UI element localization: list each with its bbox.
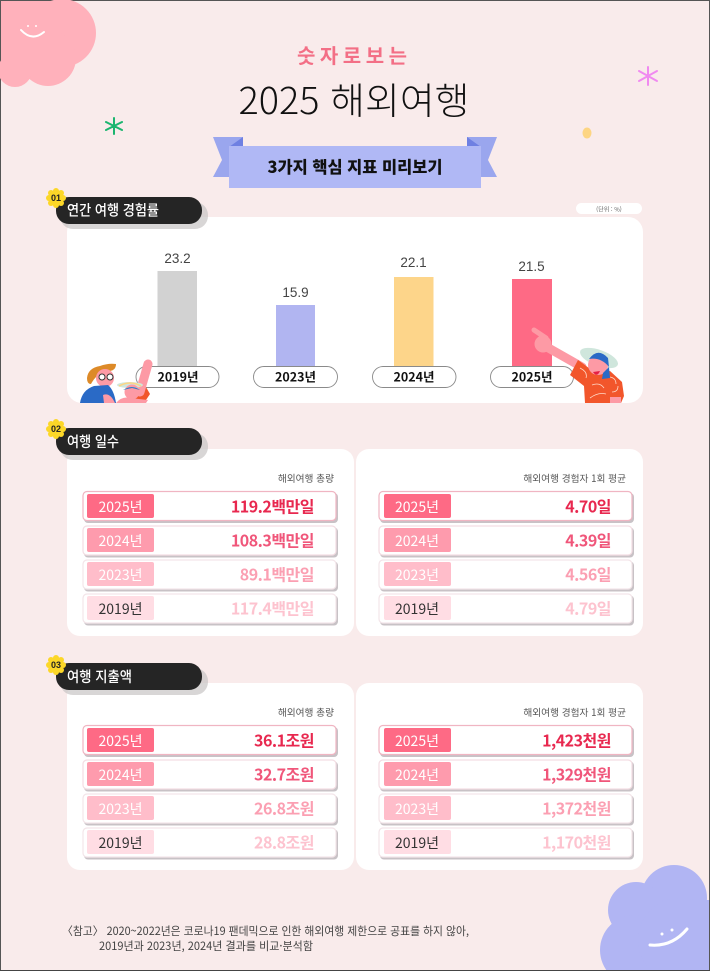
bar chart: 21.5 [518,259,545,274]
unit label [576,203,642,214]
bar chart [136,251,574,388]
row 2024: 2024년 [395,531,439,551]
panel: spending total [67,683,354,870]
footnote [62,923,469,954]
ribbon banner [213,137,497,188]
row 2023: 4.56일 [565,562,611,586]
row 2025: 4.70일 [565,494,611,518]
row 2023 [83,560,338,592]
row 2024 [83,760,338,792]
row 2025: 2025년 [395,497,439,517]
badge 02: 02 [51,424,61,434]
row 2025: 119.2백만일 [231,494,314,518]
row 2023 [379,794,634,826]
row 2024: 108.3백만일 [231,528,314,552]
footnote: 2019년과 2023년, 2024년 결과를 비교·분석함 [99,938,313,954]
row 2023: 1,372천원 [542,796,611,820]
row 2019: 2019년 [395,599,439,619]
row 2024 [83,526,338,558]
section header 01 [46,188,208,229]
bar chart: 23.2 [164,251,191,266]
row 2023 [379,560,634,592]
decoration: pink flower with smile [0,0,96,87]
row 2023: 2023년 [395,565,439,585]
row 2023: 2023년 [99,799,142,819]
row 2019 [379,828,634,860]
panel: spending per trip [356,683,643,870]
section header 03: 여행 지출액 [67,666,132,687]
row 2024: 32.7조원 [254,762,314,786]
icon: pointing traveler [534,330,624,403]
bar chart: 2019년 [157,366,199,386]
panel: travel days total [67,449,354,636]
row 2019: 2019년 [395,833,439,853]
row 2019: 2019년 [99,833,142,853]
caption: 해외여행 총량 [278,705,334,719]
row 2023: 89.1백만일 [240,562,314,586]
row 2019 [83,594,338,626]
section header 03 [46,655,208,695]
row 2019: 28.8조원 [254,830,314,854]
row 2025: 2025년 [395,731,439,751]
bar chart: 22.1 [400,255,427,270]
row 2019: 117.4백만일 [231,596,314,620]
panel: travel days per trip [356,449,643,636]
row 2025: 1,423천원 [542,728,611,752]
badge 03: 03 [51,660,61,670]
row 2025: 2025년 [99,731,142,751]
icon: couple of travelers [80,364,150,403]
row 2024: 2024년 [395,765,439,785]
badge 03 [46,655,66,675]
row 2024: 2024년 [99,765,142,785]
row 2025 [83,492,338,523]
bar chart: 2025년 [511,366,553,386]
row 2024 [379,760,634,792]
ribbon banner: 3가지 핵심 지표 미리보기 [268,154,442,178]
row 2019: 4.79일 [565,596,611,620]
bar chart: 15.9 [282,285,309,300]
row 2024: 1,329천원 [542,762,611,786]
row 2019: 2019년 [99,599,142,619]
decoration: yellow dot [582,128,592,138]
row 2024: 4.39일 [565,528,611,552]
row 2024: 2024년 [99,531,142,551]
badge 02 [46,419,66,439]
section header 02 [46,419,208,460]
caption: 해외여행 경험자 1회 평균 [523,705,626,719]
row 2023 [83,794,338,826]
caption: 해외여행 총량 [278,471,334,485]
row 2025: 36.1조원 [254,728,314,752]
unit label: (단위 : %) [596,204,622,214]
row 2024 [379,526,634,558]
section header 02: 여행 일수 [67,431,119,452]
row 2019: 1,170천원 [542,830,611,854]
decoration: green asterisk [106,118,122,134]
row 2023: 2023년 [395,799,439,819]
row 2025 [379,492,634,523]
caption: 해외여행 경험자 1회 평균 [523,471,626,485]
row 2025 [83,726,338,757]
row 2019 [83,828,338,860]
decoration: periwinkle flower with smile [600,865,710,971]
panel: annual travel experience rate [67,217,643,403]
bar chart: 2024년 [393,366,435,386]
badge 01 [46,188,66,208]
footnote: 〈참고〉 2020~2022년은 코로나19 팬데믹으로 인한 해외여행 제한으로 공표를 하지 않아, [62,923,469,939]
title: 2025 해외여행 [238,71,470,125]
section header 01: 연간 여행 경험률 [67,200,159,220]
decoration: violet asterisk [639,67,657,85]
row 2025 [379,726,634,757]
row 2025: 2025년 [99,497,142,517]
subtitle: 숫자로보는 [297,40,407,69]
bar chart: 2023년 [275,366,316,386]
row 2019 [379,594,634,626]
badge 01: 01 [51,193,61,203]
row 2023: 2023년 [99,565,142,585]
row 2023: 26.8조원 [254,796,314,820]
